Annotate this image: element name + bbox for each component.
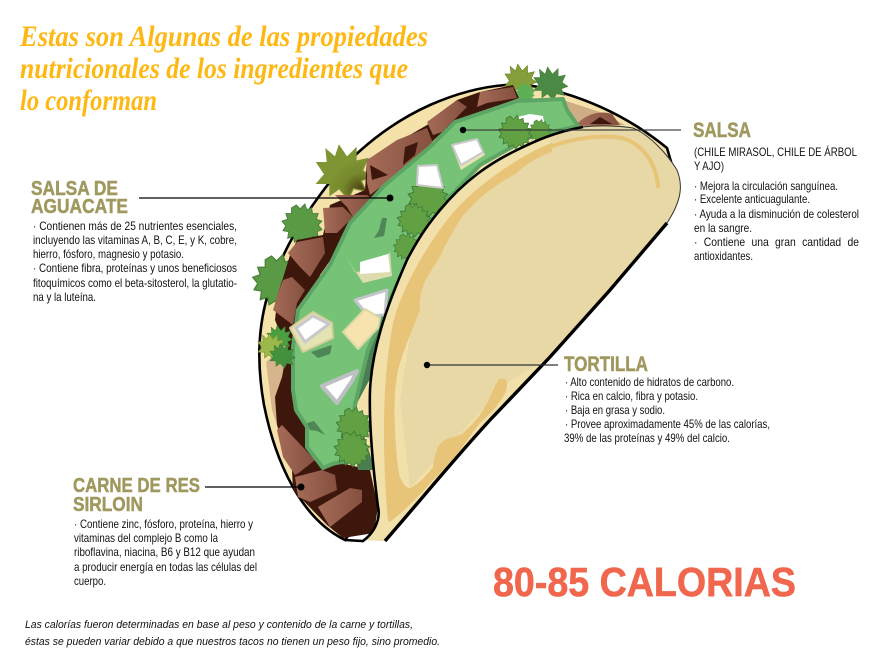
title [19,20,428,117]
heading: tortilla: TORTILLA [564,353,648,376]
salsa de aguacate [293,99,578,468]
deep green shadow under salsa [345,170,485,470]
text: salsa: · Mejora la circulación sanguínea. [694,179,838,193]
calories callout: 80-85 CALORIAS [493,559,796,605]
meat shadows [370,117,612,180]
panel: salsa de aguacate [31,178,394,304]
panel: tortilla [424,353,770,445]
heading: carne de res sirloin [73,475,200,516]
leader line: carne [205,484,304,490]
title: Estas son Algunas de las propiedades [19,20,428,53]
title: nutricionales de los ingredientes que [20,52,408,85]
cheese pieces [290,139,485,403]
leader line: salsa [460,127,681,133]
text: salsa de aguacate: na y la luteína. [33,290,96,304]
footnote [25,619,440,648]
tan inner shell [266,345,285,425]
cilantro behind meat [253,64,568,307]
tortilla light rim [363,135,550,541]
text: tortilla: · Provee aproximadamente 45% de las calorías, [565,417,770,431]
text: carne de res sirloin: a producir energía en todas las células del [74,560,257,574]
meat pieces [273,87,620,527]
heading: salsa de aguacate: AGUACATE [31,196,128,218]
text: salsa de aguacate: · Contienen más de 25 nutrientes esenciales, [33,219,237,233]
footnote: éstas se pueden variar debido a que nuestros tacos no tienen un peso fijo, sino promedio. [25,636,440,648]
taco illustration [253,64,680,541]
tortilla outline [345,127,583,541]
footnote: Las calorías fueron determinadas en base al peso y contenido de la carne y tortillas, [25,619,413,631]
text: carne de res sirloin [74,517,257,588]
text: salsa de aguacate: fitoquímicos como el beta-sitosterol, la glutatio- [33,276,237,290]
text: tortilla: · Alto contenido de hidratos de carbono. [565,375,734,389]
cilantro on salsa [334,115,552,467]
text: salsa: · Excelente anticuagulante. [694,192,810,206]
small bright cilantro at left [258,325,295,368]
text: salsa: · Contiene una gran cantidad de [694,235,859,249]
text: tortilla: · Rica en calcio, fibra y potasio. [565,389,698,403]
dark meat base [275,85,519,538]
text: carne de res sirloin: · Contiene zinc, fósforo, proteína, hierro y [74,517,253,531]
heading: carne de res sirloin: SIRLOIN [73,494,143,516]
heading: salsa de aguacate: SALSA DE [31,178,118,200]
heading: salsa: SALSA [693,119,751,142]
heading: salsa de aguacate [31,178,128,218]
text: salsa de aguacate: incluyendo las vitaminas A, B, C, E, y K, cobre, [33,233,237,247]
text: tortilla: 39% de las proteínas y 49% del calcio. [564,431,730,445]
text: carne de res sirloin: cuerpo. [74,574,106,588]
title: lo conforman [20,84,157,117]
leader line: tortilla [424,362,558,368]
text: carne de res sirloin: riboflavina, niacina, B6 y B12 que ayudan [74,545,255,559]
leader line: salsa de aguacate [139,194,394,202]
tortilla orange thin line [550,137,658,186]
text: salsa: Y AJO) [694,159,724,173]
panel: salsa [460,119,859,263]
text: salsa de aguacate [33,219,237,304]
white cheese behind cilantro [513,114,545,128]
text: salsa de aguacate: hierro, fósforo, magnesio y potasio. [33,247,184,261]
salsa shadows [307,218,387,435]
text: salsa: antioxidantes. [694,249,753,263]
text: salsa de aguacate: · Contiene fibra, proteínas y unos beneficiosos [33,261,237,275]
panel: carne de res sirloin [73,475,304,588]
text: salsa [694,144,859,263]
text: carne de res sirloin: vitaminas del complejo B como la [74,531,218,545]
heading: carne de res sirloin: CARNE DE RES [73,475,200,497]
text: tortilla [564,375,770,445]
back tortilla shell [259,85,672,540]
text: tortilla: · Baja en grasa y sodio. [565,403,665,417]
front tortilla [363,126,680,541]
tortilla orange band [384,143,552,522]
text: salsa: en la sangre. [694,221,752,235]
